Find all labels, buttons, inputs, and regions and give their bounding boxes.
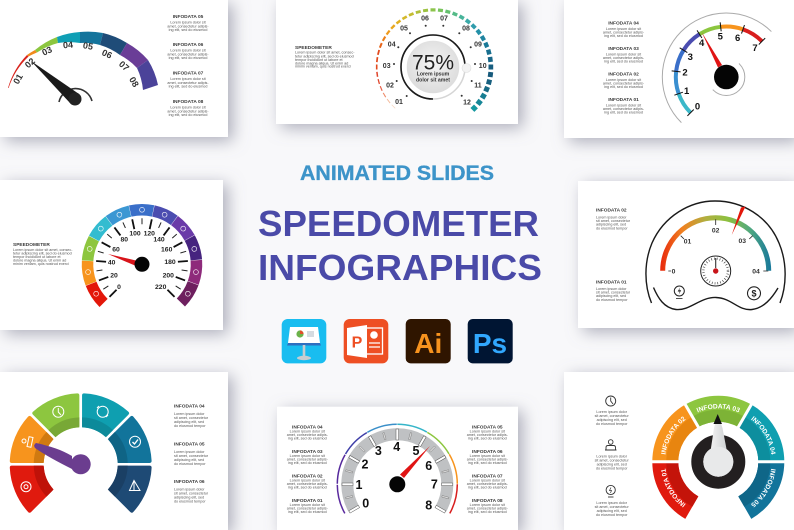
info text 01: INFODATA 01 (596, 280, 627, 286)
panel: grey band gauge 0 to 8 (277, 407, 518, 530)
left info text: ing elit, sed do eiusmod (288, 510, 327, 514)
left text blocks: sit amet, consectetur (595, 458, 629, 462)
left info text: INFODATA 01 (292, 498, 323, 504)
gauge numbers: 2 (362, 458, 369, 472)
gauge numbers: 08 (127, 75, 141, 89)
dial numbers: 08 (462, 26, 470, 32)
speed numbers: 120 (144, 230, 155, 238)
right info text: Lorem ipsum dolor sit (470, 478, 505, 482)
central knob: 75% (412, 52, 454, 74)
speedometer text: Lorem ipsum dolor sit amet, consec- (295, 50, 355, 54)
panel: segmented gauge with purple needle (0, 372, 228, 530)
speed numbers: 20 (110, 272, 118, 280)
needle and hub (702, 32, 739, 89)
info text column: ing elit, sed do eiusmod (169, 84, 207, 88)
heading: animated slides: ANIMATED SLIDES (300, 162, 494, 185)
speedometer text: tetur adipiscing elit, sed do eiusmod (295, 54, 354, 58)
speed numbers: 40 (108, 260, 116, 266)
info text column: Lorem ipsum dolor (174, 450, 205, 454)
ring dark band (672, 416, 764, 502)
info text column: adipiscing elit, sed (174, 420, 204, 424)
gauge numbers: 01 (11, 72, 25, 86)
info text column: INFODATA 05 (174, 442, 205, 448)
arc numbers: 0 (672, 268, 676, 276)
left text blocks: do eiusmod tempor (596, 513, 628, 517)
info text column: sit amet, consectetur (174, 454, 209, 458)
gauge numbers: 6 (425, 459, 432, 473)
ring icons (85, 207, 199, 297)
left info text: Lorem ipsum dolor sit (290, 478, 325, 482)
colour arc (655, 6, 794, 148)
gauge numbers (682, 32, 758, 112)
info text column: do eiusmod tempor (174, 462, 206, 466)
info text column: Lorem ipsum dolor sit (170, 106, 206, 110)
speedometer text: SPEEDOMETER (295, 45, 332, 51)
thin colour arc (337, 424, 457, 513)
icon: bolt bulb (606, 485, 615, 497)
info text column: ing elit, sed do eiusmod (604, 85, 643, 89)
icon: power bolt (674, 286, 684, 298)
right info text: Lorem ipsum dolor sit (470, 503, 505, 507)
central knob: Lorem ipsum (417, 72, 450, 78)
speed numbers: 220 (155, 284, 167, 291)
right info text: ing elit, sed do eiusmod (468, 436, 507, 440)
dial numbers: 03 (383, 63, 391, 70)
info text column: ing elit, sed do eiusmod (169, 56, 207, 60)
dial numbers: 05 (400, 26, 408, 32)
arc numbers: 03 (739, 238, 746, 245)
knob and pointer (697, 414, 739, 483)
info text column: ing elit, sed do eiusmod (169, 28, 207, 32)
panel: dashboard gauge (578, 181, 794, 328)
icon: keynote (282, 319, 326, 363)
info text column: INFODATA 07 (173, 70, 204, 76)
info text column: INFODATA 02 (608, 72, 639, 78)
gauge numbers: 1 (356, 478, 363, 492)
info text 02: Lorem ipsum dolor (596, 216, 627, 220)
left info text: amet, consectetur adipis- (287, 506, 329, 510)
info text column: Lorem ipsum dolor sit (170, 20, 206, 24)
gauge numbers: 4 (699, 38, 705, 49)
right info text: ing elit, sed do eiusmod (468, 461, 507, 465)
speed numbers: 160 (161, 246, 173, 254)
left text blocks: adipiscing elit, sed (597, 509, 627, 513)
speed numbers: 140 (153, 236, 165, 244)
right info text: Lorem ipsum dolor sit (470, 454, 505, 458)
arc numbers: 04 (752, 268, 760, 276)
dial numbers: 06 (421, 16, 429, 22)
purple needle (34, 443, 91, 474)
speed numbers: 180 (164, 259, 176, 266)
gauge numbers: 5 (718, 32, 724, 42)
left text blocks: sit amet, consectetur (595, 505, 629, 509)
panel: five segment ring with knob (560, 366, 794, 530)
dial numbers: 11 (474, 82, 482, 90)
arc numbers: 02 (712, 228, 720, 234)
gauge numbers: 0 (695, 102, 700, 112)
icon: dollar (748, 287, 760, 300)
info text column: Lorem ipsum dolor (174, 412, 205, 416)
panel: 75 percent dial (276, 0, 518, 124)
mini dial (701, 256, 731, 286)
speedometer text: tetur adipiscing elit, sed do eiusmod (13, 252, 72, 256)
segment labels: INFODATA 04 (751, 416, 776, 454)
panel: gauge with tapered arc (0, 0, 228, 137)
segment icons (21, 406, 140, 492)
major ticks (96, 219, 188, 297)
right info text: INFODATA 08 (472, 498, 503, 504)
icon: clock (606, 396, 616, 406)
speedometer text: minim veniam, quis nostrud exerci (295, 64, 351, 68)
left info text: INFODATA 04 (292, 424, 323, 430)
info text column: sit amet, consectetur (174, 492, 209, 496)
info text column: INFODATA 06 (174, 479, 205, 485)
white gaps between segments (649, 401, 788, 462)
info text 01: Lorem ipsum dolor (596, 287, 627, 291)
icon: photoshop: Ps (473, 328, 507, 359)
gradient arc (663, 218, 769, 271)
info text 01: do eiusmod tempor (596, 298, 628, 302)
colour ring segments (65, 187, 219, 341)
speed numbers (108, 230, 176, 291)
title line: infographics: INFOGRAPHICS (258, 247, 542, 288)
icon: powerpoint: P (352, 334, 363, 352)
info text column: adipiscing elit, sed (174, 496, 204, 500)
arc numbers (672, 228, 760, 276)
dial numbers (383, 16, 487, 106)
icon: person (605, 440, 616, 450)
right info text: amet, consectetur adipis- (467, 482, 509, 486)
gauge numbers: 1 (684, 86, 690, 97)
title line: speedometer: SPEEDOMETER (258, 203, 539, 244)
info text column: ing elit, sed do eiusmod (604, 110, 643, 114)
gauge numbers: 06 (100, 47, 114, 61)
info text column: sit amet, consectetur (174, 416, 209, 420)
left info text: amet, consectetur adipis- (287, 482, 329, 486)
info text column: Lorem ipsum dolor sit (606, 104, 641, 108)
right info text: ing elit, sed do eiusmod (468, 486, 507, 490)
left text blocks: sit amet, consectetur (595, 414, 629, 418)
info text column: Lorem ipsum dolor sit (606, 78, 641, 82)
gauge numbers: 3 (688, 52, 693, 63)
left info text: INFODATA 02 (292, 474, 323, 480)
gauge numbers: 6 (735, 33, 740, 44)
info text 02: do eiusmod tempor (596, 226, 628, 230)
right info text (467, 424, 509, 514)
gauge numbers: 5 (413, 444, 420, 458)
six rounded segments light band (0, 383, 162, 511)
speed numbers: 0 (117, 284, 121, 291)
info text column: INFODATA 03 (608, 46, 639, 52)
right info text: amet, consectetur adipis- (467, 506, 509, 510)
speedometer text: tempor incididunt ut labore et (13, 255, 61, 259)
left info text: Lorem ipsum dolor sit (290, 430, 325, 434)
left info text: Lorem ipsum dolor sit (290, 503, 325, 507)
info text column (603, 20, 645, 114)
info text column: ing elit, sed do eiusmod (604, 60, 643, 64)
right info text: INFODATA 05 (472, 424, 503, 430)
left info text: ing elit, sed do eiusmod (288, 486, 327, 490)
dial numbers: 04 (388, 42, 396, 48)
info text column: amet, consectetur adipis- (603, 56, 645, 60)
left info text: INFODATA 03 (292, 449, 323, 455)
icon: dollar: $ (751, 288, 757, 298)
icon: powerpoint (344, 319, 388, 363)
info text column: do eiusmod tempor (174, 424, 206, 428)
dial numbers: 09 (474, 42, 482, 48)
left text blocks: adipiscing elit, sed (597, 418, 627, 422)
left info text: amet, consectetur adipis- (287, 433, 329, 437)
gauge numbers: 7 (752, 43, 758, 54)
info text 01: adipiscing elit, sed (596, 294, 626, 298)
info text column: amet, consectetur adipis- (167, 109, 209, 113)
right info text: amet, consectetur adipis- (467, 433, 509, 437)
dial numbers: 02 (386, 82, 394, 90)
right info text: amet, consectetur adipis- (467, 458, 509, 462)
info text column: amet, consectetur adipis- (603, 30, 645, 34)
dial numbers: 10 (479, 63, 487, 70)
central knob: dolor sit amet (416, 78, 450, 84)
segment labels: INFODATA 03 (696, 404, 740, 412)
six segments dark band (25, 408, 137, 497)
speed numbers: 200 (163, 272, 174, 280)
gauge numbers: 4 (393, 440, 400, 454)
arc numbers: 01 (684, 238, 691, 246)
left info text: amet, consectetur adipis- (287, 458, 329, 462)
speedometer text: dolore magna aliqua. Ut enim ad (295, 62, 348, 66)
gauge numbers: 8 (425, 498, 432, 512)
major ticks (342, 429, 453, 513)
left text blocks: Lorem ipsum dolor (596, 454, 628, 458)
info text column (174, 404, 209, 504)
segment labels: INFODATA 02 (661, 416, 686, 454)
info text 02: sit amet, consectetur (596, 219, 631, 223)
info text 02: adipiscing elit, sed (596, 222, 626, 226)
dial numbers: 12 (463, 100, 471, 106)
info text column: amet, consectetur adipis- (167, 24, 209, 28)
tapered colour arc (8, 32, 158, 90)
segment labels: INFODATA 05 (751, 468, 776, 508)
grey arcs (636, 0, 794, 168)
speedometer text: Lorem ipsum dolor sit amet, consec- (13, 248, 73, 252)
info text column: INFODATA 04 (608, 20, 639, 26)
right info text: INFODATA 06 (472, 449, 503, 455)
gauge numbers: 07 (117, 59, 131, 73)
left text blocks: adipiscing elit, sed (597, 462, 627, 466)
speedometer text (295, 45, 355, 68)
info text column: Lorem ipsum dolor (174, 488, 205, 492)
gauge ticks (672, 22, 765, 116)
gauge numbers: 2 (682, 68, 688, 79)
minor ticks (346, 433, 449, 499)
left text blocks: do eiusmod tempor (596, 466, 628, 470)
gauge numbers: 02 (23, 56, 37, 70)
speed numbers: 80 (121, 236, 128, 244)
left info text: ing elit, sed do eiusmod (288, 461, 327, 465)
info text column: do eiusmod tempor (174, 500, 206, 504)
info text column: ing elit, sed do eiusmod (169, 113, 207, 117)
gauge numbers (11, 40, 141, 89)
dashed colour arc (376, 8, 493, 112)
info text column: INFODATA 06 (173, 42, 204, 48)
info text column: Lorem ipsum dolor sit (170, 48, 206, 52)
info text 02 (596, 208, 631, 230)
speedometer text: tempor incididunt ut labore et (295, 58, 343, 62)
speed numbers: 100 (129, 230, 141, 238)
grey band (347, 434, 447, 509)
speedometer text (13, 242, 73, 266)
info text column: Lorem ipsum dolor sit (170, 77, 206, 81)
left info text: ing elit, sed do eiusmod (288, 436, 327, 440)
right info text: ing elit, sed do eiusmod (468, 510, 507, 514)
right info text: Lorem ipsum dolor sit (470, 430, 505, 434)
arc ticks (668, 219, 768, 271)
icon: illustrator: Ai (414, 328, 442, 359)
speedometer text: dolore magna aliqua. Ut enim ad (13, 258, 66, 262)
segment labels: INFODATA 01 (661, 468, 686, 508)
left text blocks (595, 410, 629, 517)
speedometer text: SPEEDOMETER (13, 242, 50, 248)
red needle (732, 206, 746, 235)
left text blocks: Lorem ipsum dolor (596, 410, 628, 414)
central knob (401, 35, 471, 99)
gauge numbers: 04 (63, 40, 73, 50)
gauge numbers: 0 (362, 496, 369, 510)
info text column: INFODATA 08 (173, 99, 204, 105)
gauge numbers (356, 440, 438, 512)
info text 02: INFODATA 02 (596, 208, 627, 214)
gauge numbers: 03 (40, 44, 54, 58)
info text 01: sit amet, consectetur (596, 290, 631, 294)
info text column: INFODATA 01 (608, 97, 639, 103)
icon: photoshop (468, 319, 513, 363)
info text 01 (596, 280, 631, 302)
left text blocks: Lorem ipsum dolor (596, 501, 628, 505)
panel: numbered gauge 0 to 7 (564, 0, 794, 168)
right info text: INFODATA 07 (472, 474, 503, 480)
needle and hub (108, 254, 150, 272)
info text column: INFODATA 04 (174, 404, 205, 410)
speedometer text: minim veniam, quis nostrud exerci (13, 262, 69, 266)
info text column: Lorem ipsum dolor sit (606, 27, 641, 31)
segment labels (661, 404, 776, 508)
dashboard outline (646, 201, 785, 310)
info text column: adipiscing elit, sed (174, 458, 204, 462)
needle and hub (389, 446, 430, 492)
speed numbers: 60 (112, 246, 120, 254)
gauge numbers: 7 (431, 478, 438, 492)
minor ticks (96, 218, 188, 289)
dial numbers: 01 (395, 99, 403, 106)
info text column: Lorem ipsum dolor sit (606, 52, 641, 56)
gauge numbers: 05 (82, 40, 94, 52)
needle and hub (31, 61, 92, 106)
info text column: amet, consectetur adipis- (603, 107, 645, 111)
panel: 220 speedometer (0, 180, 223, 341)
gauge numbers: 3 (375, 444, 382, 458)
dial numbers: 07 (440, 16, 448, 22)
left info text (287, 424, 329, 514)
info text column: amet, consectetur adipis- (603, 82, 645, 86)
left text blocks: do eiusmod tempor (596, 422, 628, 426)
dial dots (393, 25, 476, 97)
ring light band (665, 409, 771, 508)
info text column (167, 14, 209, 117)
info text column: amet, consectetur adipis- (167, 52, 209, 56)
info text column: ing elit, sed do eiusmod (604, 34, 643, 38)
left info text: Lorem ipsum dolor sit (290, 454, 325, 458)
icon: illustrator (406, 319, 451, 363)
info text column: amet, consectetur adipis- (167, 81, 209, 85)
info text column: INFODATA 05 (173, 14, 204, 20)
